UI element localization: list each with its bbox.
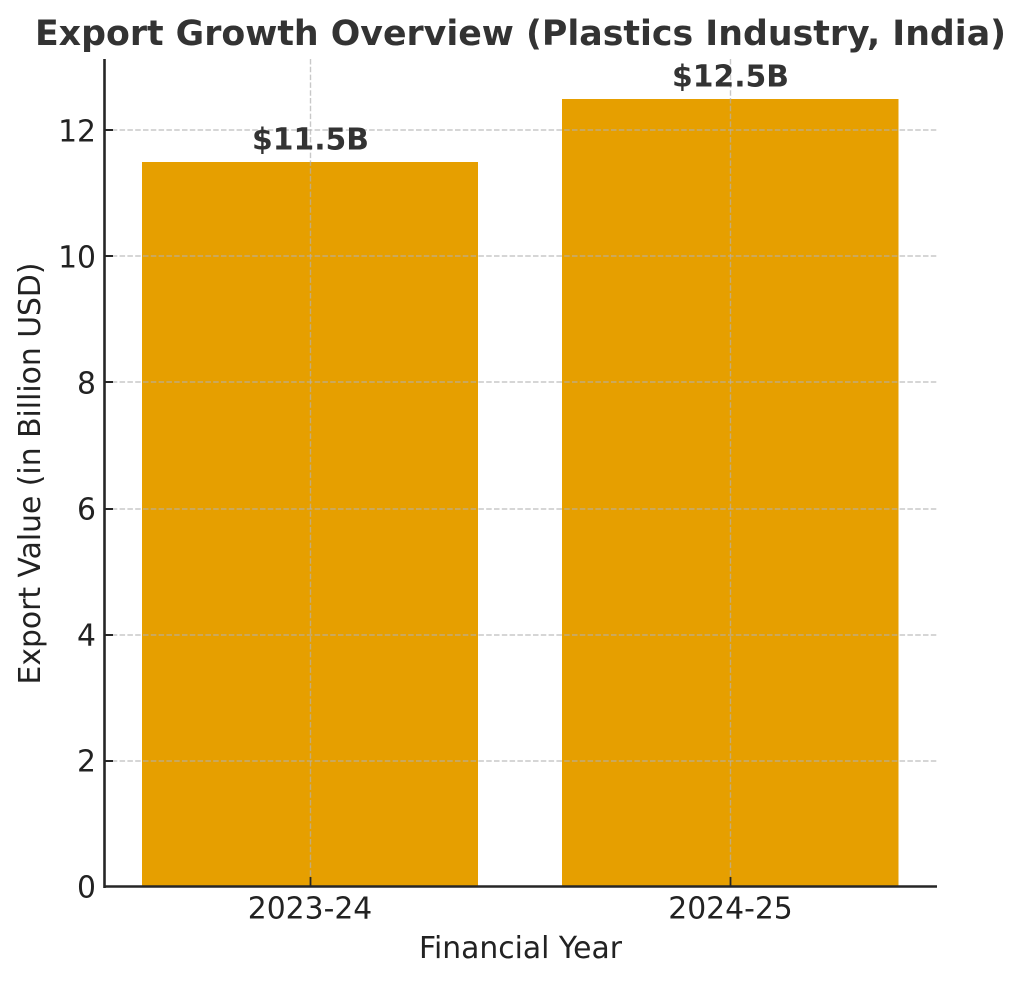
y axis tick labels: 0: [77, 870, 96, 906]
y axis tick labels: 12: [58, 114, 96, 150]
x axis tick labels: 2023-24: [248, 892, 372, 926]
x axis tick labels: 2024-25: [668, 892, 793, 926]
value label: 2023-24: $11.5B: [252, 122, 369, 158]
title: Export Growth Overview (Plastics Industry, India): [35, 14, 1006, 54]
value label: 2024-25: $12.5B: [672, 60, 789, 94]
x axis label: Financial Year: [419, 931, 623, 966]
bar: 2024-25: [562, 99, 898, 887]
y axis tick labels: 4: [77, 618, 96, 654]
y axis label: Export Value (in Billion USD): [13, 262, 48, 685]
axes: [104, 59, 937, 888]
y axis tick labels: 8: [77, 366, 96, 402]
y axis tick labels: 2: [77, 744, 96, 780]
y axis tick labels: [58, 114, 96, 906]
y axis tick labels: 6: [77, 492, 96, 528]
bar: 2023-24: [142, 162, 478, 887]
x axis tick labels: [248, 892, 793, 926]
y axis tick labels: 10: [58, 240, 96, 276]
